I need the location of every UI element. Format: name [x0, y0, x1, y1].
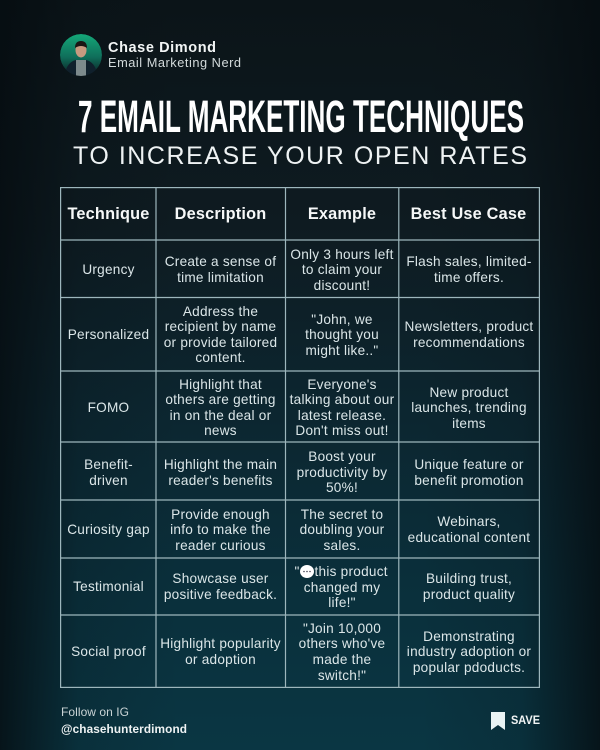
- row: Personalized: "John, we: [311, 312, 373, 327]
- row: Testimonial: [73, 564, 515, 610]
- row: FOMO: Everyone's: [307, 377, 377, 392]
- row: Personalized: content.: [195, 350, 246, 365]
- row: Social proof: industry adoption or: [407, 644, 531, 659]
- row: Social proof: made the: [313, 652, 371, 667]
- row: Social proof: Demonstrating: [423, 629, 515, 644]
- row: Personalized: might like..": [305, 343, 379, 358]
- icon: chat bubble overlay: [300, 565, 314, 578]
- table header row: [67, 205, 526, 223]
- author name and role: Email Marketing Nerd: [108, 55, 241, 70]
- row: Testimonial: life!": [328, 595, 356, 610]
- row: Testimonial: Building trust,: [426, 571, 512, 586]
- row: Urgency: [82, 247, 532, 293]
- row: Urgency: time offers.: [434, 270, 504, 285]
- title: TO INCREASE YOUR OPEN RATES: [73, 142, 527, 170]
- author name and role: [108, 40, 241, 70]
- row: Personalized: [68, 304, 533, 365]
- save button: [491, 712, 540, 730]
- row: Social proof: Social proof: [71, 644, 146, 659]
- row: Social proof: others who've: [299, 636, 385, 651]
- row: Curiosity gap: The secret to: [301, 507, 383, 522]
- row: FOMO: launches, trending: [411, 400, 527, 415]
- row: Benefit-driven: benefit promotion: [414, 473, 524, 488]
- row: Social proof: popular pdoducts.: [413, 660, 525, 675]
- row: Personalized: or provide tailored: [164, 335, 277, 350]
- row: FOMO: talking about our: [290, 392, 395, 407]
- row: FOMO: others are getting: [165, 392, 276, 407]
- row: Urgency: Only 3 hours left: [290, 247, 394, 262]
- table header row: Technique: [67, 205, 150, 223]
- row: Benefit-driven: [84, 449, 524, 495]
- row: Urgency: to claim your: [302, 262, 382, 277]
- row: Social proof: "Join 10,000: [303, 621, 381, 636]
- row: Benefit-driven: productivity by: [297, 465, 387, 480]
- row: Urgency: Urgency: [82, 262, 135, 277]
- row: Curiosity gap: doubling your: [300, 522, 385, 537]
- row: Benefit-driven: driven: [89, 473, 128, 488]
- row: FOMO: [88, 377, 527, 438]
- row: Urgency: discount!: [314, 278, 370, 293]
- row: Social proof: [71, 621, 531, 683]
- table header row: Description: [175, 205, 266, 223]
- row: Urgency: Flash sales, limited-: [406, 254, 532, 269]
- row: Personalized: recipient by name: [165, 319, 276, 334]
- footer: Instagram handle: [61, 705, 187, 736]
- row: FOMO: news: [204, 423, 237, 438]
- title: [73, 91, 527, 170]
- row: Curiosity gap: Provide enough: [171, 507, 270, 522]
- row: Benefit-driven: Highlight the main: [164, 457, 277, 472]
- row: Benefit-driven: reader's benefits: [168, 473, 273, 488]
- row: FOMO: Highlight that: [179, 377, 262, 392]
- row: Benefit-driven: Benefit-: [84, 457, 133, 472]
- row: FOMO: items: [452, 416, 486, 431]
- row: Curiosity gap: info to make the: [170, 522, 271, 537]
- table grid: [61, 188, 539, 687]
- author name and role: Chase Dimond: [108, 40, 216, 56]
- comparison table: [61, 188, 539, 687]
- row: Testimonial: changed my: [304, 580, 380, 595]
- row: FOMO: Don't miss out!: [295, 423, 389, 438]
- row: Social proof: switch!": [318, 668, 366, 683]
- table header row: Example: [308, 205, 376, 223]
- row: Personalized: Personalized: [68, 327, 149, 342]
- row: Curiosity gap: Webinars,: [437, 514, 501, 529]
- row: FOMO: New product: [429, 385, 509, 400]
- row: Curiosity gap: Curiosity gap: [67, 522, 150, 537]
- row: Curiosity gap: reader curious: [175, 538, 266, 553]
- footer: Instagram handle: Follow on IG: [61, 705, 129, 719]
- row: Testimonial: Showcase user: [172, 571, 269, 586]
- row: Benefit-driven: Boost your: [308, 449, 376, 464]
- icon: bookmark: [491, 712, 505, 730]
- row: Testimonial: this product: [314, 564, 388, 579]
- row: Benefit-driven: Unique feature or: [414, 457, 524, 472]
- row: Benefit-driven: 50%!: [326, 480, 358, 495]
- table header row: Best Use Case: [411, 205, 526, 223]
- row: Testimonial: Testimonial: [73, 579, 144, 594]
- row: Testimonial: ": [294, 564, 300, 579]
- save button: SAVE: [511, 715, 540, 727]
- row: Personalized: Newsletters, product: [405, 319, 533, 334]
- row: Urgency: time limitation: [177, 270, 264, 285]
- row: Testimonial: positive feedback.: [164, 587, 277, 602]
- row: Social proof: Highlight popularity: [160, 636, 281, 651]
- row: FOMO: FOMO: [88, 400, 129, 415]
- row: Personalized: recommendations: [413, 335, 525, 350]
- row: Curiosity gap: [67, 507, 530, 553]
- row: Curiosity gap: sales.: [323, 538, 361, 553]
- row: FOMO: latest release.: [298, 408, 386, 423]
- row: Personalized: thought you: [305, 327, 379, 342]
- row: Testimonial: product quality: [423, 587, 515, 602]
- row: Curiosity gap: educational content: [408, 530, 530, 545]
- row: FOMO: in on the deal or: [170, 408, 272, 423]
- avatar: Chase Dimond: [60, 34, 102, 78]
- footer: Instagram handle: @chasehunterdimond: [61, 722, 187, 736]
- row: Social proof: or adoption: [185, 652, 256, 667]
- row: Personalized: Address the: [183, 304, 258, 319]
- row: Urgency: Create a sense of: [165, 254, 276, 269]
